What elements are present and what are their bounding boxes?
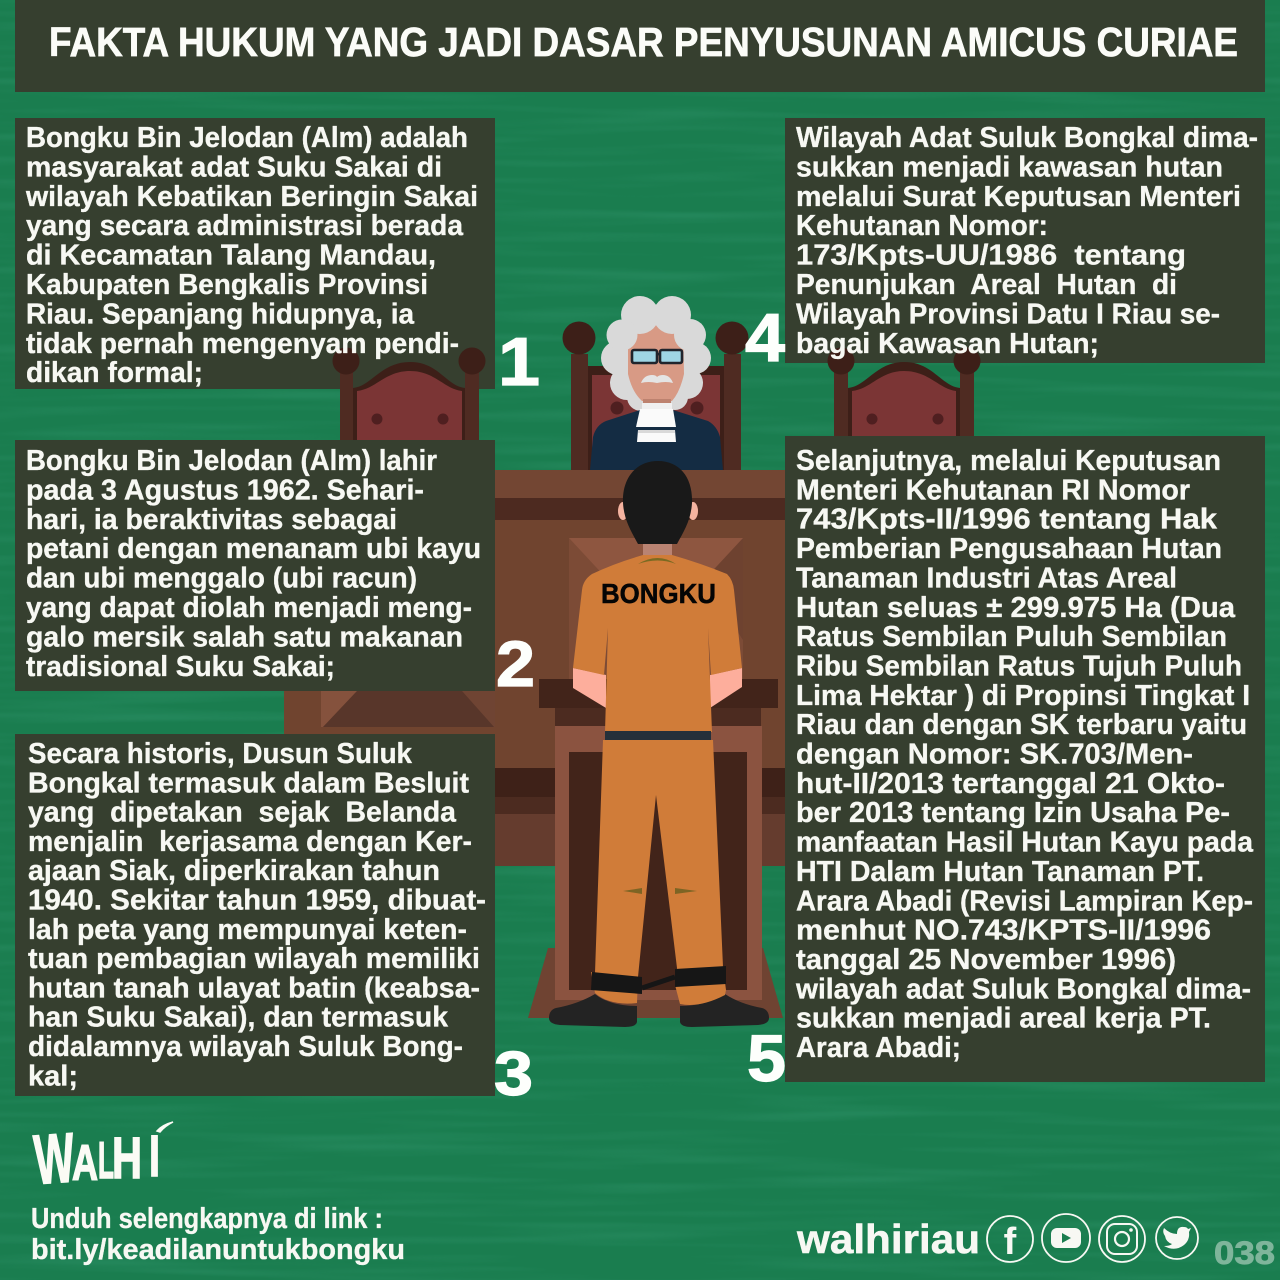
- ankle cuffs and chain: [591, 966, 726, 994]
- text block 5: Arara Abadi (Revisi Lampiran Kep-: [796, 885, 1253, 917]
- text block 1: Bongku Bin Jelodan (Alm) adalah: [26, 122, 468, 154]
- jabot: [636, 403, 676, 442]
- text block 2: [26, 445, 481, 683]
- WALHI logo: H: [112, 1126, 142, 1191]
- judge figure: [590, 296, 723, 470]
- download link text: [31, 1203, 405, 1266]
- panel 3 background: [15, 734, 495, 1096]
- text block 5: Pemberian Pengusahaan Hutan: [796, 533, 1222, 565]
- text block 4: Wilayah Provinsi Datu I Riau se-: [796, 298, 1220, 330]
- edition number: 038: [1214, 1235, 1275, 1271]
- text block 3: menjalin kerjasama dengan Ker-: [28, 826, 472, 858]
- judge's chair: [562, 322, 748, 472]
- text block 3: han Suku Sakai), dan termasuk: [28, 1002, 449, 1034]
- social handle: walhiriau: [796, 1216, 980, 1262]
- text block 1: Kabupaten Bengkalis Provinsi: [26, 269, 428, 301]
- text block 4: [796, 122, 1258, 360]
- face: [628, 325, 684, 401]
- text block 3: tuan pembagian wilayah memiliki: [28, 943, 480, 975]
- text block 5: tanggal 25 November 1996): [796, 944, 1176, 976]
- neck: [643, 540, 672, 558]
- text block 2: dan ubi menggalo (ubi racun): [26, 563, 417, 595]
- text block 3: ajaan Siak, diperkirakan tahun: [28, 855, 440, 887]
- text block 2: hari, ia beraktivitas sebagai: [26, 504, 397, 536]
- collar: [638, 558, 676, 564]
- text block 5: Menteri Kehutanan RI Nomor: [796, 474, 1190, 506]
- text block 5: [795, 445, 1254, 1064]
- text block 2: tradisional Suku Sakai;: [26, 651, 335, 683]
- wig back: [601, 320, 711, 411]
- icon: facebook: f: [1004, 1221, 1017, 1263]
- WALHI logo: [32, 1118, 173, 1199]
- text block 3: hutan tanah ulayat batin (keabsa-: [28, 972, 480, 1004]
- WALHI logo: A: [72, 1135, 98, 1191]
- text block 1: [25, 122, 478, 389]
- number 2: 2: [496, 628, 535, 700]
- text block 5: Selanjutnya, melalui Keputusan: [796, 445, 1221, 477]
- hands: [573, 668, 742, 708]
- text block 2: yang dapat diolah menjadi meng-: [26, 592, 472, 624]
- panel 1 background: [15, 118, 495, 389]
- download link text: Unduh selengkapnya di link :: [31, 1203, 383, 1235]
- text block 5: Riau dan dengan SK terbaru yaitu: [796, 709, 1247, 741]
- text block 3: didalamnya wilayah Suluk Bong-: [28, 1031, 463, 1063]
- text block 4: bagai Kawasan Hutan;: [796, 328, 1099, 360]
- ears: [618, 502, 698, 520]
- panel 2 background: [15, 440, 495, 691]
- name on back: BONGKU: [601, 578, 716, 609]
- knee creases: [623, 888, 642, 894]
- icon: instagram: [1099, 1216, 1145, 1262]
- number 1: 1: [498, 324, 540, 400]
- shoes: [549, 994, 769, 1027]
- text block 5: dengan Nomor: SK.703/Men-: [796, 738, 1193, 770]
- text block 3: [28, 738, 486, 1092]
- number 3: 3: [494, 1040, 533, 1109]
- download link text: bit.ly/keadilanuntukbongku: [31, 1234, 405, 1266]
- text block 4: melalui Surat Keputusan Menteri: [796, 181, 1241, 213]
- number 4: 4: [745, 300, 785, 376]
- text block 5: 743/Kpts-II/1996 tentang Hak: [796, 504, 1218, 536]
- text block 5: HTI Dalam Hutan Tanaman PT.: [796, 856, 1204, 888]
- text block 1: yang secara administrasi berada: [26, 210, 464, 242]
- text block 2: pada 3 Agustus 1962. Sehari-: [26, 474, 424, 506]
- panel 5 background: [785, 436, 1265, 1082]
- icon: left empty chair: [332, 348, 486, 442]
- text block 1: wilayah Kebatikan Beringin Sakai: [25, 181, 478, 213]
- WALHI logo: W: [32, 1118, 77, 1199]
- WALHI logo: L: [98, 1132, 114, 1190]
- text block 4: sukkan menjadi kawasan hutan: [796, 151, 1223, 183]
- text block 2: Bongku Bin Jelodan (Alm) lahir: [26, 445, 437, 477]
- text block 4: Penunjukan Areal Hutan di: [796, 269, 1177, 301]
- text block 4: 173/Kpts-UU/1986 tentang: [796, 240, 1186, 272]
- text block 2: petani dengan menanam ubi kayu: [26, 533, 481, 565]
- text block 1: di Kecamatan Talang Mandau,: [26, 240, 436, 272]
- wig front curls: [606, 296, 706, 351]
- text block 1: Riau. Sepanjang hidupnya, ia: [26, 298, 415, 330]
- text block 5: Lima Hektar ) di Propinsi Tingkat I: [796, 680, 1250, 712]
- text block 5: ber 2013 tentang Izin Usaha Pe-: [796, 797, 1230, 829]
- text block 1: masyarakat adat Suku Sakai di: [26, 151, 442, 183]
- glasses: [632, 350, 682, 363]
- courtroom desk: [284, 470, 804, 866]
- WALHI logo: I: [149, 1124, 160, 1189]
- icon: youtube: [1042, 1214, 1090, 1262]
- text block 1: dikan formal;: [26, 357, 203, 389]
- moustache: [641, 375, 673, 383]
- text block 1: tidak pernah mengenyam pendi-: [26, 328, 459, 360]
- text block 5: Tanaman Industri Atas Areal: [796, 562, 1177, 594]
- text block 3: Bongkal termasuk dalam Besluit: [28, 767, 469, 799]
- text block 5: Hutan seluas ± 299.975 Ha (Dua: [796, 592, 1236, 624]
- prisoner Bongku: [549, 461, 769, 1027]
- panel 4 background: [785, 118, 1265, 363]
- text block 3: lah peta yang mempunyai keten-: [28, 914, 467, 946]
- text block 5: Arara Abadi;: [796, 1032, 961, 1064]
- text block 5: menhut NO.743/KPTS-II/1996: [796, 915, 1211, 947]
- podium: [528, 679, 783, 1018]
- icon: right empty chair: [828, 348, 980, 438]
- text block 3: 1940. Sekitar tahun 1959, dibuat-: [28, 884, 486, 916]
- orange uniform: [573, 555, 742, 732]
- text block 3: Secara historis, Dusun Suluk: [28, 738, 413, 770]
- text block 3: yang dipetakan sejak Belanda: [28, 797, 457, 829]
- icon: twitter: [1156, 1217, 1198, 1259]
- text block 5: manfaatan Hasil Hutan Kayu pada: [796, 827, 1254, 859]
- text block 4: Kehutanan Nomor:: [796, 210, 1048, 242]
- text block 5: wilayah adat Suluk Bongkal dima-: [795, 973, 1251, 1005]
- text block 5: Ribu Sembilan Ratus Tujuh Puluh: [796, 650, 1242, 682]
- number 5: 5: [747, 1021, 786, 1095]
- text block 5: hut-II/2013 tertanggal 21 Okto-: [796, 768, 1225, 800]
- text block 5: Ratus Sembilan Puluh Sembilan: [796, 621, 1227, 653]
- text block 5: sukkan menjadi areal kerja PT.: [796, 1003, 1211, 1035]
- text block 4: Wilayah Adat Suluk Bongkal dima-: [796, 122, 1258, 154]
- icon: facebook: [987, 1216, 1033, 1263]
- title bar: [15, 0, 1265, 92]
- hair: [623, 461, 692, 544]
- belt: [605, 731, 711, 740]
- text block 2: galo mersik salah satu makanan: [26, 621, 463, 653]
- text block 3: kal;: [28, 1060, 78, 1092]
